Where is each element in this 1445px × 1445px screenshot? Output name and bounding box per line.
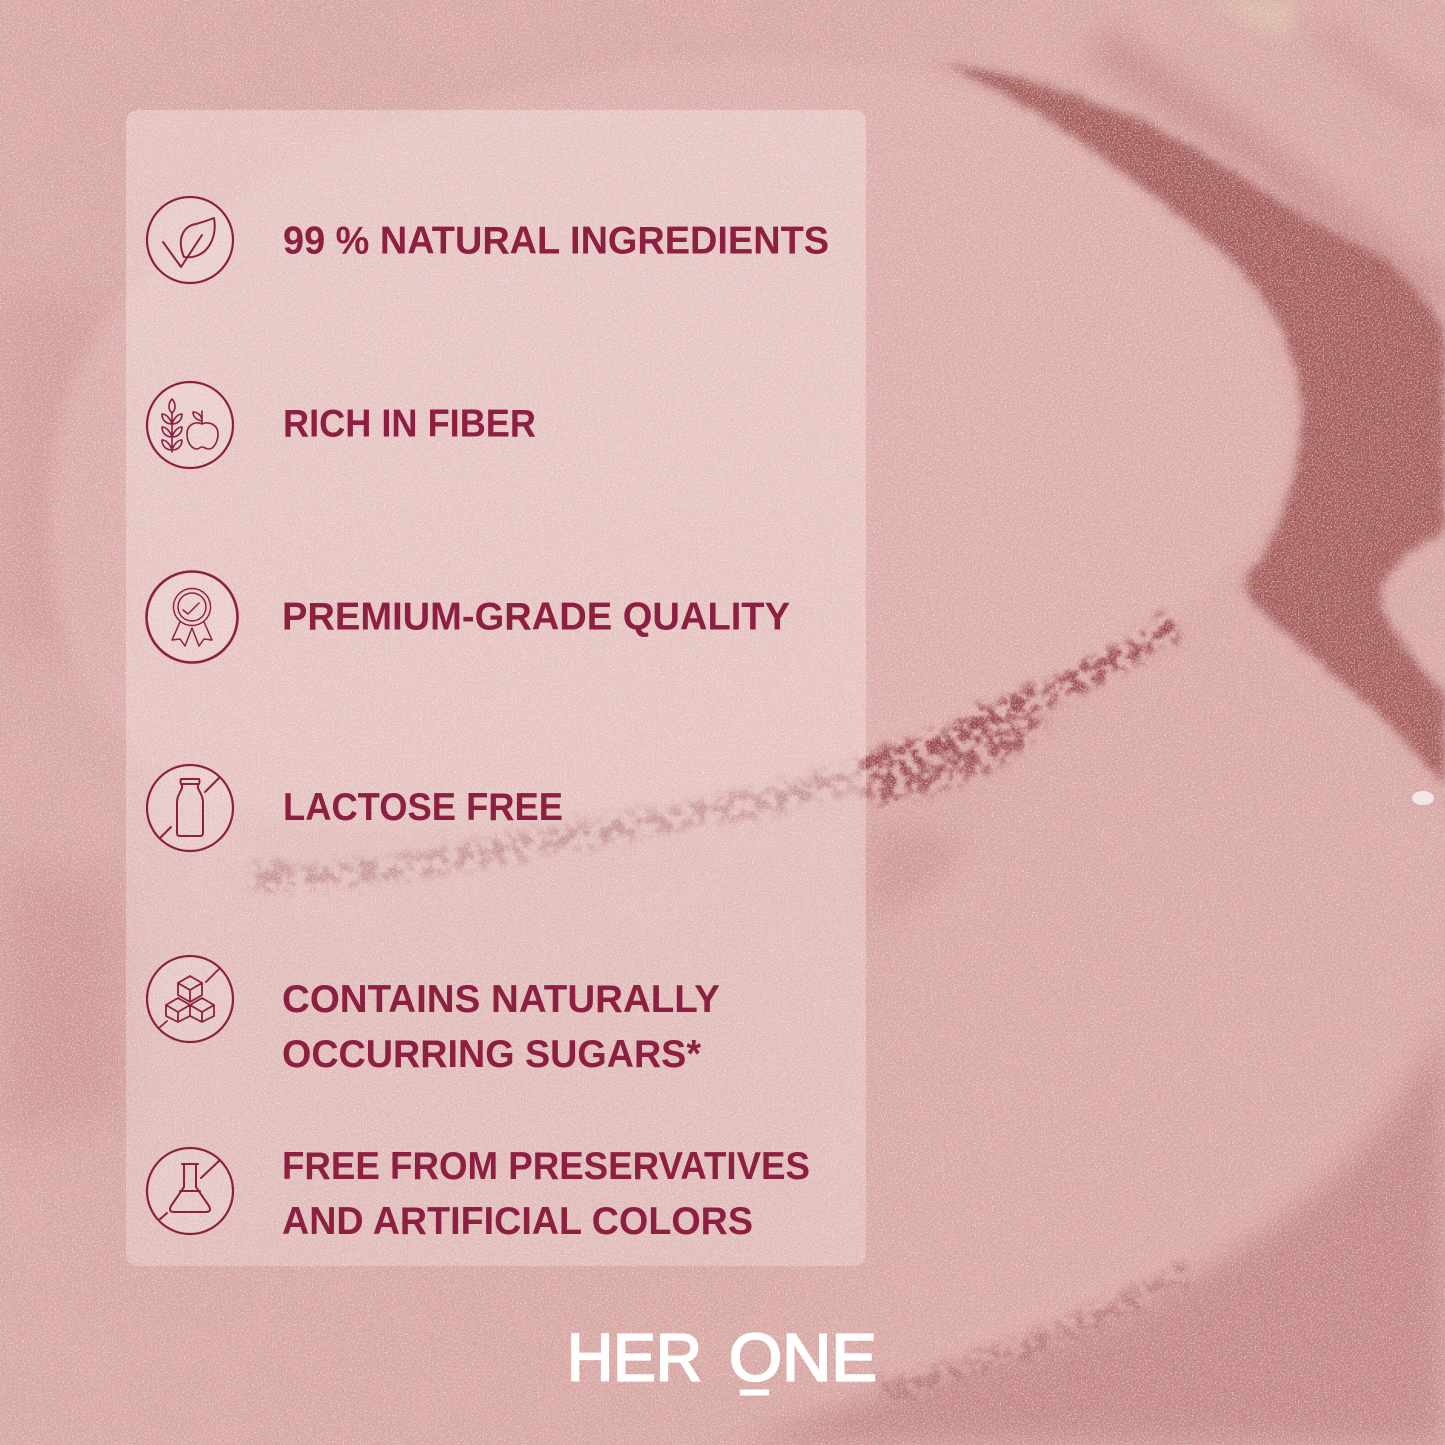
icon: leaf check bbox=[147, 197, 233, 283]
item: free from preservatives bbox=[147, 1145, 810, 1243]
icon: crossed milk bottle bbox=[147, 765, 233, 851]
item: premium quality bbox=[146, 572, 790, 662]
label: free from preservatives and artificial colors bbox=[282, 1145, 810, 1243]
logo: Her One bbox=[567, 1320, 877, 1396]
icon: crossed flask bbox=[147, 1148, 233, 1234]
label: contains naturally occurring sugars: OCCURRING SUGARS* bbox=[282, 1033, 701, 1076]
label: contains naturally occurring sugars bbox=[282, 978, 720, 1076]
label: contains naturally occurring sugars: CONTAINS NATURALLY bbox=[282, 978, 720, 1021]
icon: wheat and apple bbox=[147, 382, 233, 468]
icon: award ribbon bbox=[146, 572, 238, 662]
label: lactose free: LACTOSE FREE bbox=[283, 786, 563, 829]
logo: Her One: ONE bbox=[729, 1320, 877, 1396]
item: natural sugars bbox=[147, 956, 720, 1076]
icon: crossed sugar cubes bbox=[147, 956, 233, 1042]
item: rich in fiber bbox=[147, 382, 536, 468]
item: natural ingredients bbox=[147, 197, 829, 283]
label: 99 % natural ingredients: 99 % NATURAL INGREDIENTS bbox=[283, 220, 829, 262]
item: lactose free bbox=[147, 765, 563, 851]
label: free from preservatives and artificial colors: AND ARTIFICIAL COLORS bbox=[282, 1200, 753, 1243]
label: premium-grade quality: PREMIUM-GRADE QUALITY bbox=[282, 596, 790, 638]
label: free from preservatives and artificial colors: FREE FROM PRESERVATIVES bbox=[282, 1145, 810, 1188]
label: rich in fiber: RICH IN FIBER bbox=[283, 402, 536, 446]
translucent panel bbox=[126, 110, 866, 1266]
logo: Her One: HER bbox=[567, 1320, 702, 1396]
